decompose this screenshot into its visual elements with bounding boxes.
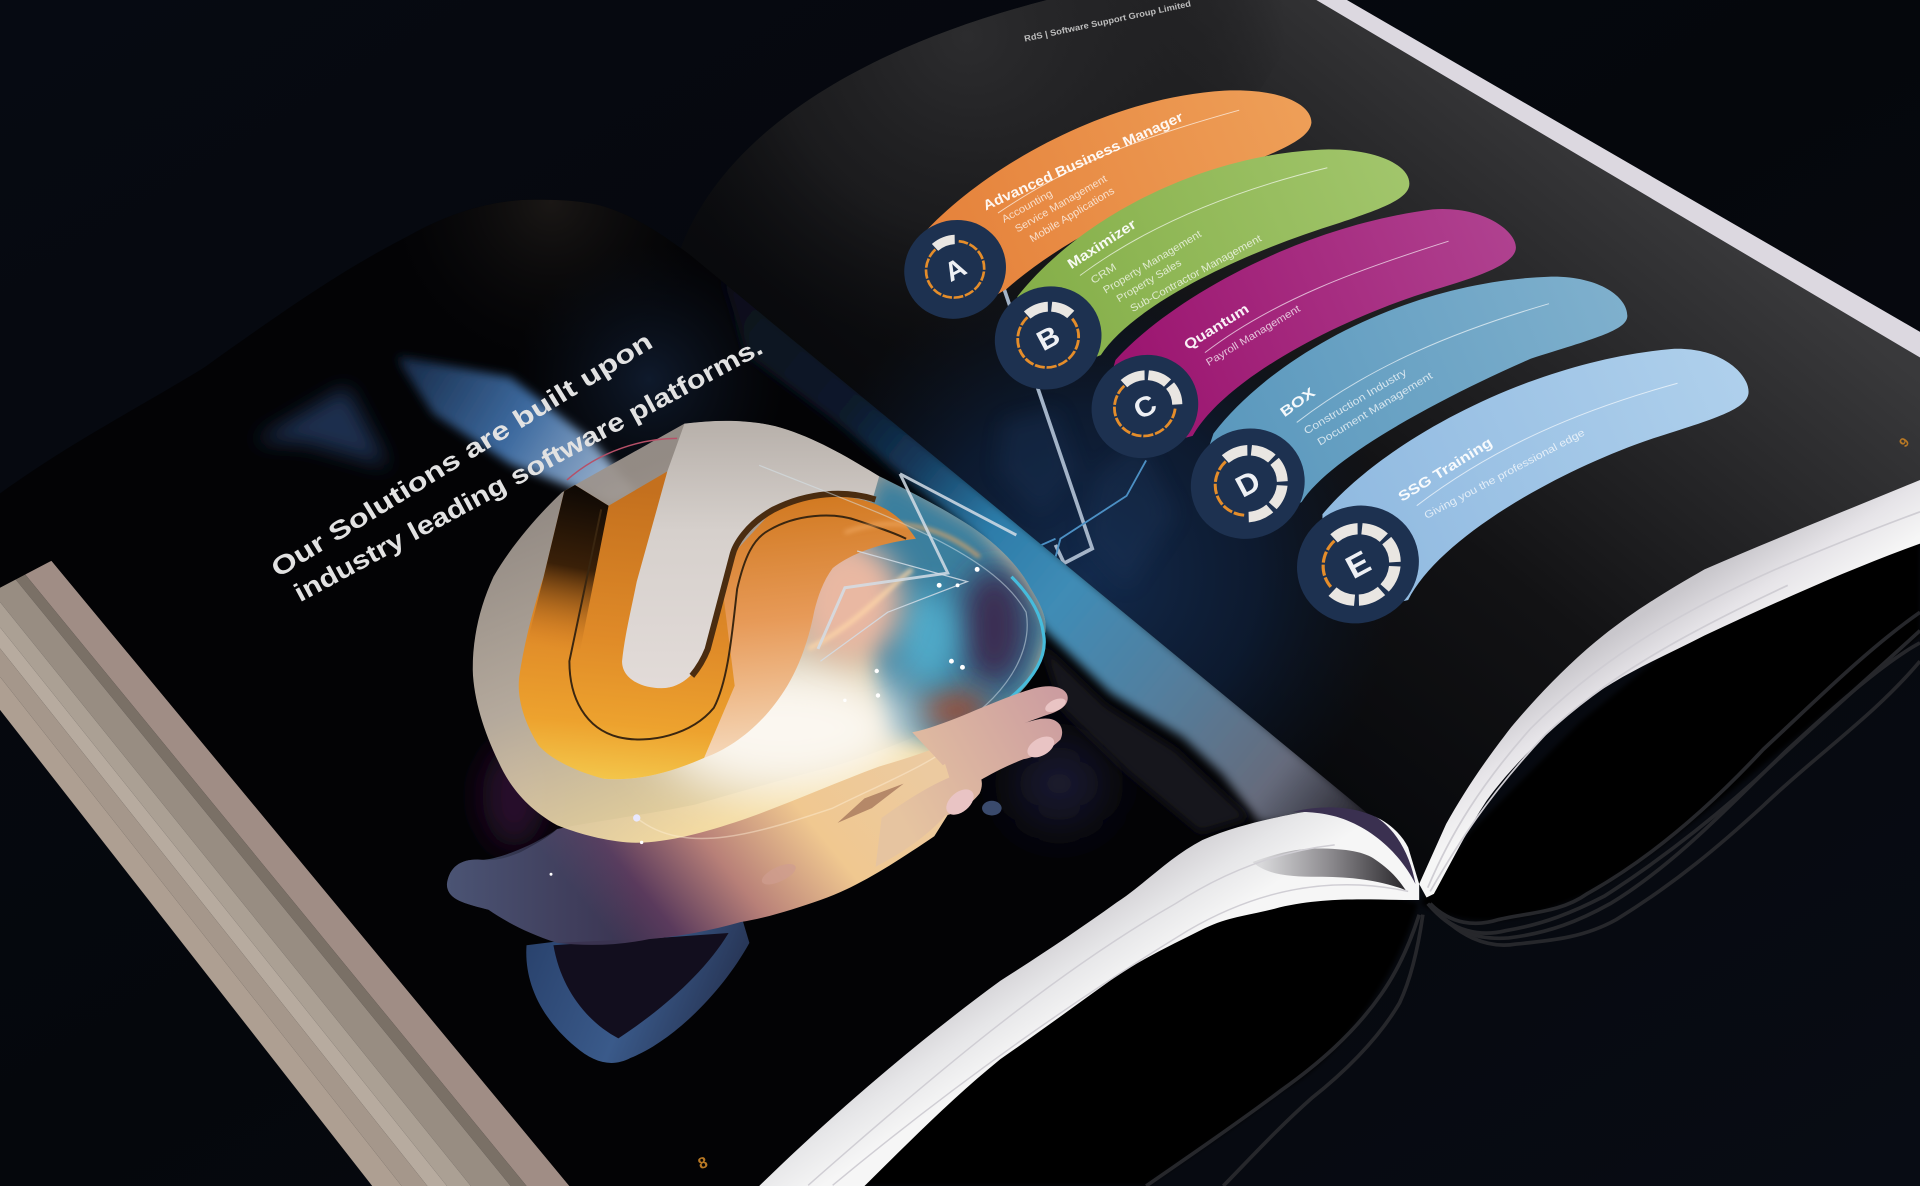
badge E: E [1340,543,1376,586]
orange S arm [604,496,916,779]
left page edge stack [0,561,569,1186]
index finger [912,686,1068,765]
faint circuit figures [998,410,1176,588]
reflection lines left [1146,915,1423,1186]
navy upper suit [556,288,743,462]
ribbon B: Maximizer [1010,149,1409,373]
black shadow under left pages [784,845,1418,1186]
little finger [759,860,799,889]
ribbon B: Maximizer: Maximizer [1064,215,1139,272]
badge B: B [1032,320,1065,358]
top page highlight [476,200,625,278]
navy background glow [784,269,1396,882]
dark plum glow [960,568,1029,686]
red brown lower glow [921,691,989,730]
inner curl shadow [1253,849,1406,890]
left page [0,200,1367,1186]
soft white glow [655,661,912,796]
tie with light rays [398,356,638,503]
palm crease [838,784,904,823]
blue sheen along fold [722,276,1378,823]
stack sheet lines [1428,512,1920,891]
magenta glow at sphere base [482,744,546,847]
ribbon B: Maximizer: Sub-Contractor Management [1129,233,1264,315]
tan band 1 [24,561,569,1186]
tan band 6 [0,600,427,1186]
heading: industry leading software platforms. [290,333,768,608]
upper left grey shading [680,0,1316,367]
badge C: C [1129,389,1162,426]
heading [266,328,768,608]
ribbon C: Quantum: Payroll Management [1204,304,1303,369]
badge C [1073,336,1216,477]
ribbon A: Advanced Business Manager: Advanced Business Manager [980,108,1186,213]
badge D: D [1230,463,1266,504]
hand palm [447,732,967,945]
sparkles [550,567,980,876]
page header: RdS | Software Support Group Limited [1023,0,1192,44]
purple page curl [1293,807,1416,884]
blue lens body [857,471,1053,747]
middle finger [943,718,1062,796]
ribbon B: Maximizer: Property Management [1102,229,1204,296]
dark finger edge [692,494,876,676]
tan band 5 [0,595,447,1186]
rim arc [1009,576,1046,697]
purple suit below fingers [1015,742,1103,825]
nails [942,696,1068,820]
ribbon A: Advanced Business Manager [918,90,1311,312]
ring finger [876,771,982,867]
thin blue circuit line [1022,460,1146,557]
hand cuff [526,918,749,1063]
connector line artwork [1004,289,1146,563]
reflection lines right [1428,612,1920,945]
orbital rings and light streaks [567,438,1027,839]
ribbon D: BOX: Construction Industry [1302,367,1410,437]
tan band 7 [0,607,402,1186]
fingers [759,686,1068,889]
panel: solutions ribbons [887,90,1749,645]
page number 8: 8 [696,1154,710,1173]
tan band 4 [0,588,471,1186]
ring on finger [982,801,1002,815]
ribbon D: BOX: Document Management [1316,371,1435,448]
page surface [680,0,1920,884]
badge A: A [939,251,971,288]
dark U shoulder [531,485,608,638]
ribbon D: BOX [1206,277,1627,533]
logo sphere [465,416,1053,857]
sheet lines [808,845,1408,1185]
badge B [977,268,1120,408]
black shadow under right pages [1420,514,1920,921]
ribbon B: Maximizer: CRM [1089,262,1119,287]
grey connector [1004,289,1092,563]
page fore edge [1316,0,1920,358]
ribbon C: Quantum [1108,209,1516,447]
left page stack [759,807,1419,1186]
white finger [622,421,879,688]
teal glow [899,590,958,683]
right page stack [1419,480,1920,898]
page surface [0,224,1257,1186]
inner logo line [569,509,906,739]
white triangle lines [818,474,1016,661]
page number 9: 9 [1896,435,1912,450]
heading: Our Solutions are built upon [266,328,658,583]
ribbon A: Advanced Business Manager: Accounting [1000,188,1055,225]
sphere body [465,416,1053,857]
badge E [1276,484,1440,645]
ribbon E: SSG Training [1322,349,1749,612]
tan band 2 [14,573,527,1186]
right peach glow [800,541,902,659]
ribbon E: SSG Training: SSG Training [1395,434,1495,505]
ribbon E: SSG Training: Giving you the professional edge [1423,427,1587,522]
tan band 3 [0,577,511,1186]
ribbon A: Advanced Business Manager: Service Management [1014,174,1109,235]
ribbon A: Advanced Business Manager: Mobile Applications [1028,186,1117,245]
ribbon D: BOX: BOX [1277,384,1319,420]
badge D [1171,408,1324,559]
badge A [887,202,1023,337]
ribbon B: Maximizer: Property Sales [1115,258,1184,305]
orange U left arm [519,471,735,779]
right page [680,0,1920,898]
dark suit wedge [1041,643,1249,833]
ribbon C: Quantum: Quantum [1181,300,1252,353]
left lapel shape [255,387,388,467]
sheet block [759,810,1419,1186]
